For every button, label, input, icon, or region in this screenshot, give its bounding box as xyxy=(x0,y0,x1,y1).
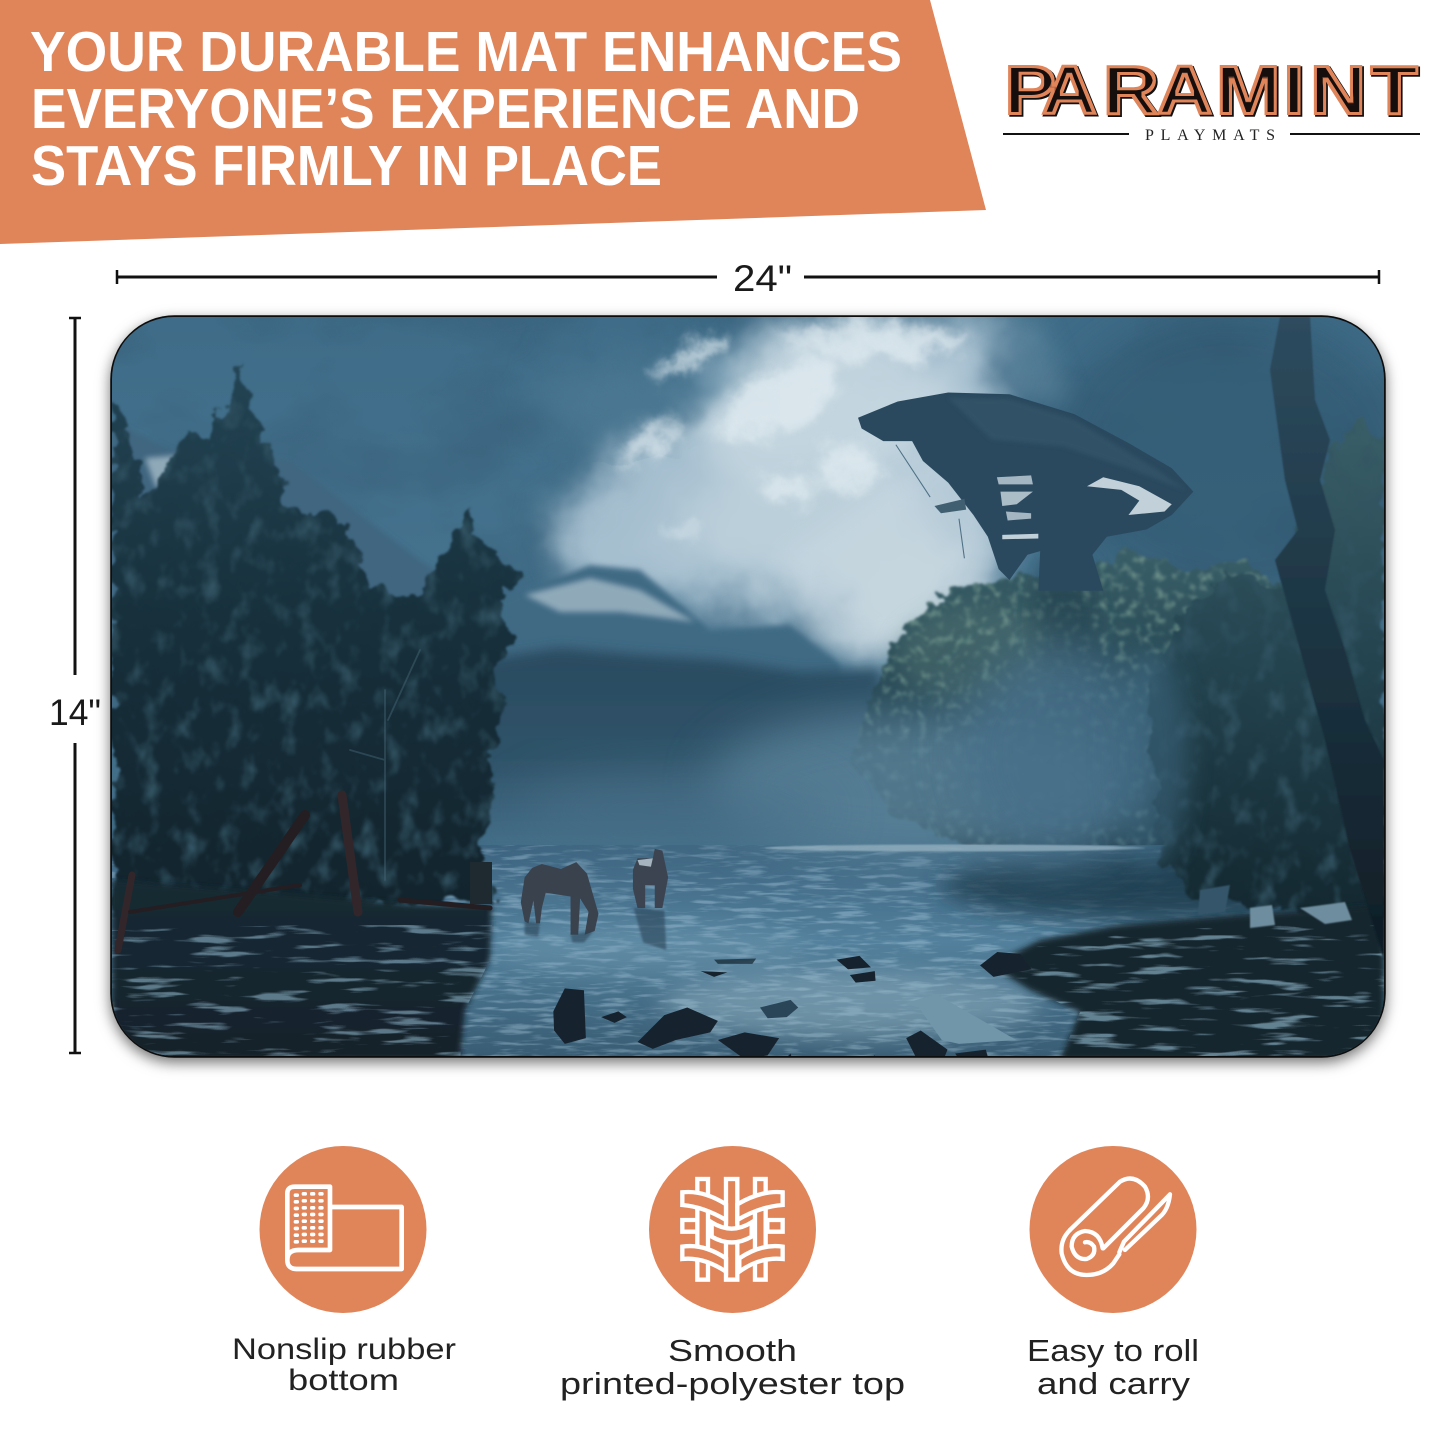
bright storm clouds xyxy=(540,317,1070,650)
left forest xyxy=(112,365,517,920)
logo sub-line: PLAYMATS xyxy=(1145,127,1275,144)
rocks xyxy=(553,952,1032,1056)
hull highlight xyxy=(956,400,1164,478)
heading text xyxy=(30,20,902,198)
snow patches xyxy=(145,455,695,622)
logo wordmark: PARAMINT xyxy=(1004,51,1418,129)
label: and carry xyxy=(1037,1366,1191,1401)
dark tree trunk xyxy=(1270,317,1384,960)
sky xyxy=(112,310,1410,877)
playmat base with drop shadow xyxy=(112,316,1384,1056)
heading text: EVERYONE’S EXPERIENCE AND xyxy=(31,77,860,141)
hull damage lights xyxy=(934,475,1172,539)
label: printed-polyester top xyxy=(560,1366,905,1401)
fog over the lake xyxy=(520,645,1160,865)
label: Easy to roll xyxy=(1027,1333,1199,1368)
light shaft xyxy=(790,462,996,660)
label: bottom xyxy=(288,1364,399,1397)
dark cloud folds xyxy=(540,344,740,445)
playmat artwork xyxy=(112,310,1420,1092)
label: Nonslip rubber xyxy=(232,1333,456,1366)
logo: Paramint Playmats xyxy=(1003,51,1420,144)
label xyxy=(560,1333,905,1401)
right forest xyxy=(1150,415,1384,920)
bare snags on left bank xyxy=(118,650,492,950)
height dimension: 14 inches xyxy=(49,318,101,1053)
crashed spaceship xyxy=(858,392,1193,591)
horse standing xyxy=(633,849,668,908)
width dimension: 24 inches xyxy=(117,258,1379,299)
horse grazing xyxy=(521,862,598,935)
mist on right forest edge xyxy=(1112,650,1188,870)
feature: easy to roll and carry xyxy=(1027,1146,1199,1401)
central forest with green highlights xyxy=(850,548,1290,860)
broad cloud mass xyxy=(560,317,1010,650)
width dimension: 24 inches: 24" xyxy=(733,258,792,299)
water xyxy=(112,845,1420,1060)
feature: smooth printed-polyester top xyxy=(560,1146,905,1401)
mid-distance tree line xyxy=(486,644,882,818)
pale rock slab xyxy=(914,998,1016,1044)
left river bank xyxy=(112,880,497,1060)
reflections xyxy=(525,908,666,950)
logo wordmark: PARAMINT xyxy=(1005,52,1420,131)
icon: woven fabric xyxy=(649,1146,816,1313)
bright cloud wisps xyxy=(618,324,970,540)
label xyxy=(232,1333,456,1397)
label xyxy=(1027,1333,1199,1401)
heading text: YOUR DURABLE MAT ENHANCES xyxy=(30,20,902,84)
feature: nonslip rubber bottom xyxy=(232,1146,456,1397)
icon: rubber mat corner xyxy=(260,1146,426,1313)
label: Smooth xyxy=(668,1333,797,1368)
logo wordmark: PARAMINT xyxy=(1004,51,1418,129)
pale shore rocks xyxy=(1198,885,1352,928)
heading banner xyxy=(0,0,986,244)
right river bank xyxy=(990,885,1384,1060)
height dimension: 14 inches: 14" xyxy=(49,692,101,733)
hanging wires xyxy=(896,445,964,558)
heading text: STAYS FIRMLY IN PLACE xyxy=(31,134,662,198)
icon: rolled mat xyxy=(1030,1146,1196,1313)
distant mountains xyxy=(114,433,840,670)
stream rocks and horses xyxy=(520,848,1032,1056)
